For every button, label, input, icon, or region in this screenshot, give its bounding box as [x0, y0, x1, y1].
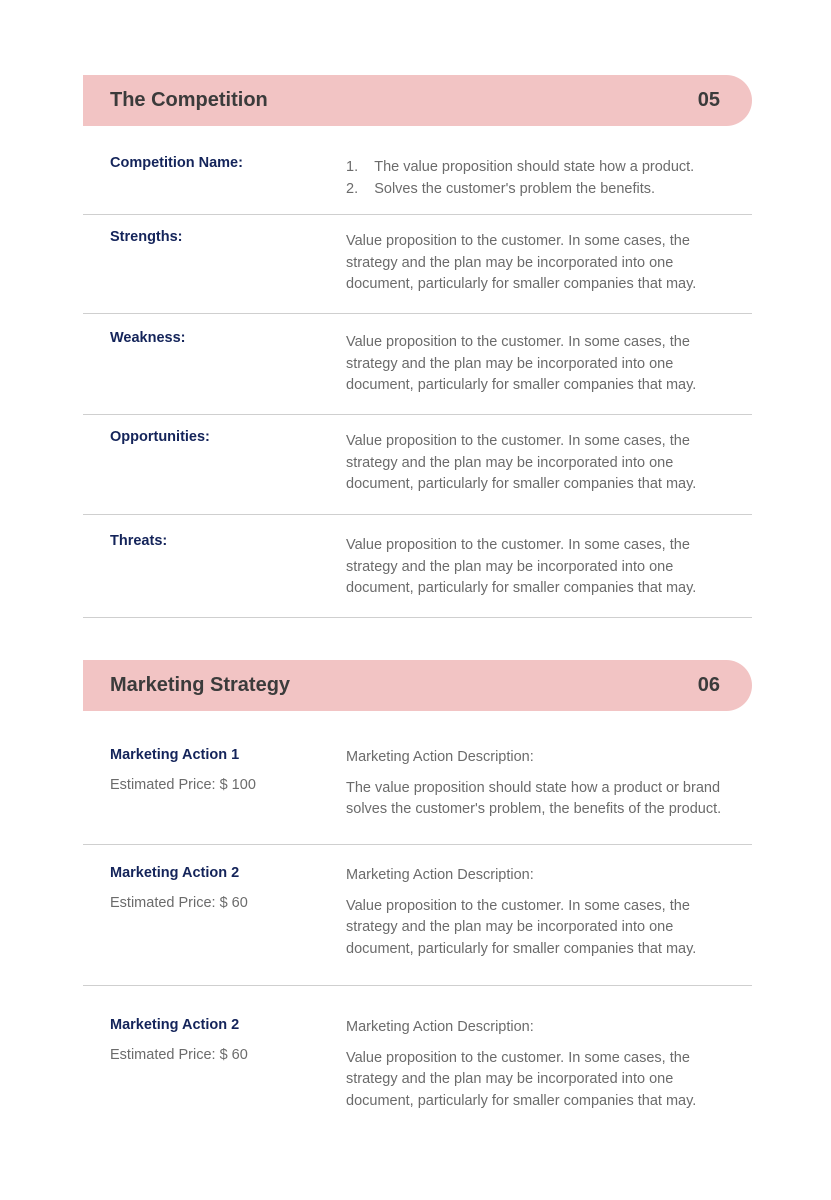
label: Strengths: Strengths: — [110, 229, 182, 245]
text: action 2 description: Value proposition to the customer. In some cases, the strategy and the plan may be incorporated into one document, particularly for smaller companies that may. — [346, 898, 696, 957]
price: action 3: Estimated Price: $ 60 — [110, 1047, 248, 1063]
text: action 2 description — [346, 867, 696, 957]
text: action 1 description: Marketing Action Description: — [346, 749, 534, 765]
text: action 1 description: The value proposition should state how a product or brand solves the customer's problem, the benefits of the product. — [346, 780, 721, 817]
text: weakness: Value proposition to the customer. In some cases, the strategy and the plan may be incorporated into one document, particularly for smaller companies that may. — [346, 334, 696, 393]
label: Opportunities: Opportunities: — [110, 429, 210, 445]
price: action 2: Estimated Price: $ 60 — [110, 895, 248, 911]
header: The Competition: The Competition — [110, 89, 268, 111]
header: Marketing Strategy: 06 — [698, 674, 720, 696]
price: action 1: Estimated Price: $ 100 — [110, 777, 256, 793]
label: Marketing Action 2: Marketing Action 2 — [110, 865, 239, 881]
text: action 2 description: Marketing Action Description: — [346, 867, 534, 883]
label: Competition Name: Competition Name: — [110, 155, 243, 171]
label: Marketing Action 1: Marketing Action 1 — [110, 747, 239, 763]
text: strengths: Value proposition to the customer. In some cases, the strategy and the plan may be incorporated into one document, particularly for smaller companies that may. — [346, 233, 696, 292]
header: The Competition: 05 — [698, 89, 720, 111]
header: The Competition — [83, 75, 752, 126]
list: competition name: 2. Solves the customer's problem the benefits. — [346, 181, 655, 197]
text: action 3 description — [346, 1019, 696, 1109]
text: action 3 description: Marketing Action Description: — [346, 1019, 534, 1035]
label: Marketing Action 2 (second): Marketing Action 2 — [110, 1017, 239, 1033]
text: action 1 description — [346, 749, 721, 817]
list: competition name: 1. The value proposition should state how a product. — [346, 159, 694, 175]
text: opportunities: Value proposition to the customer. In some cases, the strategy and the plan may be incorporated into one document, particularly for smaller companies that may. — [346, 433, 696, 492]
text: action 3 description: Value proposition to the customer. In some cases, the strategy and the plan may be incorporated into one document, particularly for smaller companies that may. — [346, 1050, 696, 1109]
list: competition name — [346, 159, 694, 197]
text: threats: Value proposition to the customer. In some cases, the strategy and the plan may be incorporated into one document, particularly for smaller companies that may. — [346, 537, 696, 596]
label: Weakness: Weakness: — [110, 330, 186, 346]
header: Marketing Strategy: Marketing Strategy — [110, 674, 290, 696]
label: Threats: Threats: — [110, 533, 167, 549]
header: Marketing Strategy — [83, 660, 752, 711]
